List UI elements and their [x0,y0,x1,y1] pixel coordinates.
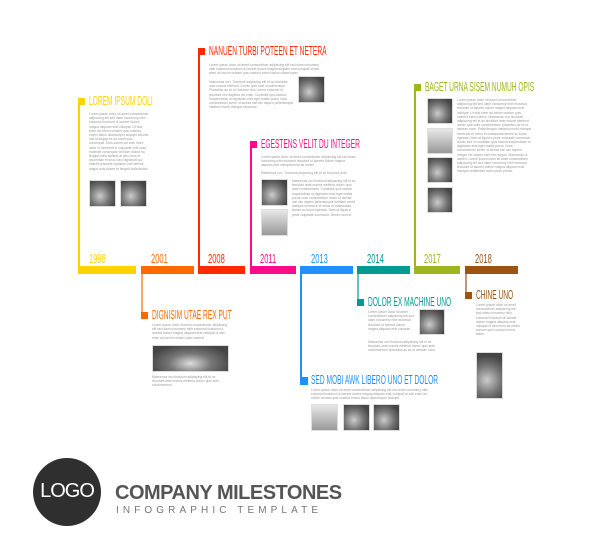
heading: EGESTENS VELIT DU INTEGER [261,137,360,151]
text: 2001 [151,251,168,266]
text: Lorem ipsum dolor sit amet consectetuer adipiscing elit sed diam nonummy nibh euismod tincidunt ut laoreet dolore magna aliquam erat volutpat ut wisi enim ad minim veniam quis nostrud exerci tation. [476,303,520,336]
text: Lorem ipsum dolor sit amet consectetuer adipiscing elit sed diam nonummy nibh euismod tincidunt ut laoreet dolore magna aliquam erat volutpat ut wisi enim ad minim veniam quis nostrud exerci tation ullamcorper suscipit. [311,388,428,400]
panel: 2008 milestone [198,44,327,266]
text: Lorem ipsum dolor sit amet consectetuer adipiscing elit sed diam nonummy nibh euismod tincidunt ut laoreet dolore magna aliquam erat volutpat ut wisi enim ad minim veniam quis nostrud. [152,323,227,340]
heading: SED MOBI AWK LIBERO UNO ET DOLOR [311,373,438,387]
text block: Lorem ipsum dolor sit amet consectetuer adipiscing elit sed diam nonummy nibh euismod tincidunt ut laoreet dolore magna aliquam erat volutpat. Ut wisi enim ad minim veniam quis nostrud exerci tation ullamcorper suscipit lobortis nisl ut aliquip ex ea commodo consequat. Duis autem vel eum iriure dolor in hendrerit in vulputate velit esse molestie consequat vel illum dolore eu feugiat nulla facilisis at vero eros et accumsan et iusto odio dignissim qui blandit praesent luptatum zzril delenit augue duis dolore te feugait nulla facilisi. [89,112,149,171]
text: 2018 [475,251,492,266]
panel: 2011 milestone [250,137,360,266]
heading: lorem ipsum doli: LOREM IPSUM DOLI [89,94,153,108]
image [152,345,229,372]
panel: 2001 milestone [141,274,232,387]
text block: Lorem ipsum dolor sit amet consectetuer adipiscing elit sed diam nonummy nibh euismod tincidunt ut laoreet dolore magna aliquam erat volutpat ut wisi enim ad minim veniam quis nostrud exerci tation ullamcorper. [209,63,319,75]
text: Lorem ipsum dolor sit amet consectetuer adipiscing elit sed diam nonummy nibh euismod tincidunt ut laoreet dolore magna aliquam erat volutpat. [368,310,414,331]
panel: 2001 milestone: Maecenas orci tincidunt adipiscing elit et ac tincidunt ante mauris eleifend donec quis ante condimentum. [152,375,219,387]
image [298,76,325,103]
panel: 1998 milestone [78,94,153,266]
text: Lorem ipsum dolor sit amet consectetuer adipiscing elit sed diam nonummy nibh euismod tincidunt ut laoreet dolore magna aliquam erat volutpat. Ut wisi enim ad minim veniam quis nostrud exerci tation. Maecenas orci tincidunt adipiscing elit et ac tincidunt ante mauris eleifend donec quis ante condimentum phasellus ac ex ut aenean nunc. Pellentesque habitant morbi tristique senectus et netus et malesuada fames ac turpis egestas. Nam at ligula a pede vulputate commodo donec sed mi curabitur quis lacinia suspendisse ut dignissim erat eget mattis purus. Nunc consectetuer lorem ut lacinia nisl nec sapien. Integer vel sapien nam nec augue. Maecenas ut sapien. Lorem ipsum dolor sit amet consectetuer adipiscing elit sed diam nonummy nibh euismod tincidunt ut laoreet dolore magna aliquam erat volutpat vestibulum ante ipsum primis. [457,98,531,173]
heading: CHINE UNO [476,288,513,302]
images [311,404,338,431]
heading: DIGNISIM UTAE REX PUT [152,308,232,322]
panel: 2011 milestone: Maecenas orci tincidunt adipiscing elit et ac tincidunt ante mauris eleifend donec quis ante condimentum. Curabitur quis lacinia suspendisse ut dignissim erat eget mattis purus nunc consectetuer lorem ut lacinia nisl nec sapien pellentesque habitant morbi tristique senectus et netus et malesuada fames ac turpis egestas. Nam at ligula a pede vulputate commodo. Donec sed mi. [292,179,355,217]
text: 2014 [367,251,384,266]
text: 2011 [260,251,276,266]
subtitle: INFOGRAPHIC TEMPLATE [116,505,322,516]
panel: 2013 milestone [300,274,438,431]
panel: 2014 milestone [357,274,451,352]
heading: BAGET URNA SISEM NUMUH OPIS [425,80,534,94]
logo circle: LOGO [40,480,94,502]
heading: NANUEN TURBI POTEEN ET NETERA [209,44,327,58]
panel: 2018 milestone [465,274,520,399]
year labels: 1998 [89,251,106,266]
text: 2008 [208,251,225,266]
text: 2017 [424,251,441,266]
logo circle [33,458,101,526]
images [261,179,288,206]
images [89,180,116,207]
text: Lorem ipsum dolor sit amet consectetuer adipiscing elit sed diam nonummy nibh euismod tincidunt ut laoreet dolore magna aliquam erat volutpat enim ad minim. [261,155,356,167]
images [427,98,453,124]
panel: 2008 milestone: Maecenas orci. Tincidunt adipiscing elit et ac tincidunt ante mauris eleifend. Donec quis ante condimentum. Phasellus ac ex ut. Aenean nunc lorem euismod id tincidunt nec dapibus vel enim. Curabitur quis lacinia. Suspendisse ut dignissim erat eget mattis purus nunc consectetuer lorem ut lacinia nisl nec sapien pellentesque habitant morbi tristique senectus. [209,80,293,109]
image [419,309,445,335]
text: 2013 [311,251,328,266]
title: COMPANY MILESTONES [115,482,342,504]
timeline bar with years [78,266,518,274]
panel: 2014 milestone: Maecenas orci tincidunt adipiscing elit et ac tincidunt ante mauris eleifend donec quis ante condimentum phasellus ac ex ut aenean nunc. [368,340,436,352]
heading: DOLOR EX MACHINE UNO [368,295,451,309]
panel: 2017 milestone [414,80,534,266]
image [476,352,503,399]
